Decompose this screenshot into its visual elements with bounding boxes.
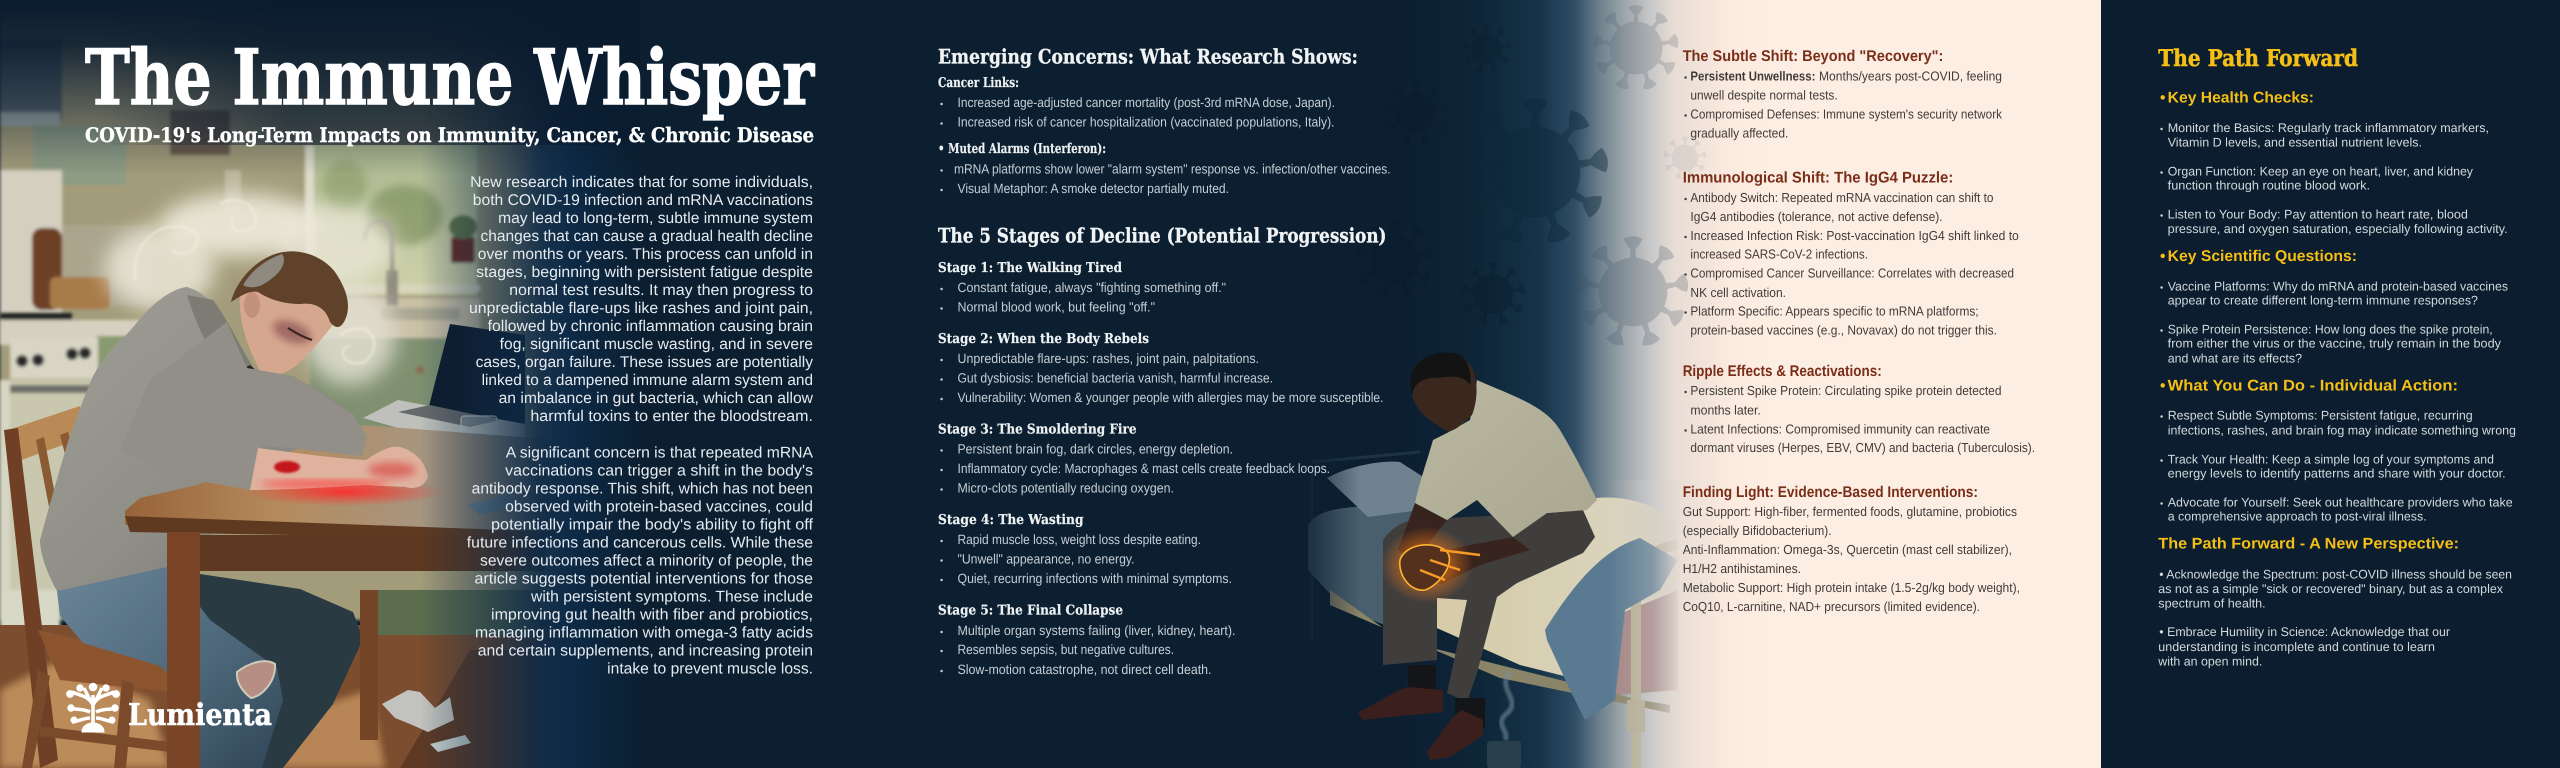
section: key health checks: • [2160, 124, 2163, 134]
logo wordmark: Lumienta [128, 698, 272, 733]
kitchen wall and cabinets [0, 23, 548, 622]
section: finding light: Metabolic Support: High protein intake (1.5-2g/kg body weight), [1683, 580, 2020, 595]
fade: kitchen into navy (top) [0, 0, 640, 175]
right dark panel [2101, 0, 2560, 768]
section: ripple effects: Latent Infections: Compromised immunity can reactivate [1690, 422, 1990, 436]
section: what you can do: • [2160, 455, 2163, 465]
stage 2: Gut dysbiosis: beneficial bacteria vanish, harmful increase. [958, 370, 1273, 386]
stage 3: Persistent brain fog, dark circles, energy depletion. [958, 442, 1233, 456]
stage 1: Normal blood work, but feeling "off." [958, 300, 1155, 314]
stage 3: Stage 3: The Smoldering Fire [938, 422, 1136, 438]
stage 2: Stage 2: When the Body Rebels [938, 331, 1149, 347]
stage 3 [938, 422, 1330, 496]
text block: intro paragraph: unpredictable flare-ups like rashes and joint pain, [469, 300, 813, 317]
text block: intro paragraph: an imbalance in gut bacteria, which can allow [499, 390, 814, 407]
logo icon [67, 683, 119, 732]
section: what you can do: What You Can Do - Individual Action: [2168, 377, 2458, 394]
section: immunological shift: IgG4 antibodies (tolerance, not active defense). [1690, 209, 1943, 224]
text block: intro paragraph: cases, organ failure. These issues are potentially [476, 354, 813, 371]
stage 3: • [940, 446, 943, 456]
logo: Lumienta [67, 683, 272, 733]
section: what you can do [2160, 377, 2516, 524]
stage 4: • [940, 536, 943, 546]
heading: five stages: The 5 Stages of Decline (Potential Progression) [938, 224, 1386, 248]
list: muted alarms: Visual Metaphor: A smoke detector partially muted. [958, 181, 1229, 196]
section: immunological shift: Increased Infection Risk: Post-vaccination IgG4 shift linked to [1690, 228, 2019, 243]
section: key health checks: Vitamin D levels, and essential nutrient levels. [2168, 135, 2422, 149]
stage 5: • [940, 627, 943, 637]
stage 3: • [940, 485, 943, 495]
stage 1 [938, 260, 1226, 314]
stage 1: Constant fatigue, always "fighting something off." [958, 280, 1226, 295]
text block: second paragraph: article suggests potential interventions for those [474, 571, 813, 588]
crumpled tissue and pill pack [382, 690, 471, 752]
section: finding light: CoQ10, L-carnitine, NAD+ precursors (limited evidence). [1683, 599, 1980, 614]
section: a new perspective: spectrum of health. [2158, 596, 2266, 610]
man: forearms [1398, 503, 1530, 585]
section: immunological shift: • [1684, 232, 1687, 242]
section: key scientific questions: • [2160, 326, 2163, 336]
smoke around head [105, 193, 396, 385]
section: key scientific questions: and what are its effects? [2168, 351, 2302, 365]
text block: second paragraph [467, 444, 814, 678]
virus dark 3 [1355, 221, 1435, 299]
glowing hands [1381, 527, 1480, 603]
list: muted alarms: • [940, 185, 943, 195]
stage 5 [938, 603, 1236, 677]
man: trousers [1383, 510, 1595, 702]
section: key scientific questions: Key Scientific Questions: [2168, 248, 2357, 265]
section: key health checks: • [2160, 89, 2165, 106]
fade: bed right into peach [1610, 480, 1680, 768]
laptop and water glass [363, 324, 525, 437]
fade: kitchen into navy (right) [420, 0, 640, 768]
stage 5: • [940, 646, 943, 656]
stage 5: Slow-motion catastrophe, not direct cell death. [958, 662, 1212, 677]
text block: second paragraph: managing inflammation with omega-3 fatty acids [475, 625, 813, 642]
section: the subtle shift: Persistent Unwellness: [1690, 68, 1815, 83]
section: the subtle shift [1683, 48, 2002, 141]
section: key health checks: Listen to Your Body: Pay attention to heart rate, blood [2168, 207, 2468, 221]
section: key health checks: Organ Function: Keep an eye on heart, liver, and kidney [2168, 164, 2474, 178]
list: cancer links: Cancer Links: [938, 75, 1019, 91]
section: ripple effects: dormant viruses (Herpes, EBV, CMV) and bacteria (Tuberculosis). [1690, 440, 2035, 455]
section: key health checks: pressure, and oxygen saturation, especially following activity. [2168, 222, 2508, 236]
section: what you can do: energy levels to identify patterns and share with your doctor. [2168, 466, 2506, 480]
section: immunological shift: Compromised Cancer Surveillance: Correlates with decreased [1690, 266, 2014, 281]
section: ripple effects: • [1684, 387, 1687, 397]
man: grey hoodie [40, 287, 367, 591]
text block: second paragraph: with persistent symptoms. These include [530, 589, 813, 606]
list: cancer links: Increased risk of cancer hospitalization (vaccinated populations, Italy). [958, 114, 1334, 129]
man: head [1412, 356, 1477, 431]
man: dark far leg [200, 574, 363, 768]
virus dark 2 [1383, 81, 1449, 145]
stage 4: "Unwell" appearance, no energy. [958, 552, 1134, 567]
stage 4: Stage 4: The Wasting [938, 512, 1084, 528]
section: the subtle shift: gradually affected. [1690, 126, 1788, 141]
section: the subtle shift: • [1684, 72, 1687, 82]
section: a new perspective: • Acknowledge the Spectrum: post-COVID illness should be seen [2159, 567, 2512, 581]
virus dark 1 [1462, 25, 1512, 73]
virus faint small [1663, 137, 1707, 179]
wooden chair [4, 406, 170, 768]
section: key health checks: Key Health Checks: [2168, 89, 2314, 106]
text block: intro paragraph: both COVID-19 infection and mRNA vaccinations [473, 192, 813, 209]
grey sleeve [204, 322, 367, 490]
section: key health checks [2160, 89, 2508, 236]
list: muted alarms [938, 141, 1391, 196]
stage 4 [938, 512, 1232, 586]
section: a new perspective: understanding is incomplete and continue to learn [2158, 640, 2435, 654]
text block: intro paragraph: may lead to long-term, subtle immune system [498, 210, 813, 227]
section: key scientific questions: from either the virus or the vaccine, truly remain in the body [2168, 337, 2502, 351]
section: key scientific questions [2160, 248, 2508, 365]
section: the subtle shift: The Subtle Shift: Beyond "Recovery": [1683, 48, 1943, 65]
list: muted alarms: mRNA platforms show lower "alarm system" response vs. infection/other vaccines. [954, 161, 1391, 176]
stage 4: • [940, 575, 943, 585]
section: the subtle shift: Months/years post-COVID, feeling [1819, 68, 2002, 83]
list: cancer links [938, 75, 1335, 129]
stage 3: • [940, 465, 943, 475]
section: what you can do: Advocate for Yourself: Seek out healthcare providers who take [2168, 496, 2513, 510]
list: muted alarms: • Muted Alarms (Interferon): [938, 141, 1106, 157]
section: immunological shift: Immunological Shift: The IgG4 Puzzle: [1683, 170, 1953, 187]
glowing forearm and hand with rash [250, 447, 428, 490]
section: immunological shift [1683, 170, 2019, 338]
text block: intro paragraph: New research indicates that for some individuals, [470, 174, 813, 191]
section: key health checks: function through routine blood work. [2168, 178, 2370, 192]
virus backdrop [1355, 5, 1707, 348]
man: dark socks and shoes [1358, 665, 1485, 760]
panel: kitchen illustration with man at table [0, 23, 548, 768]
section: key scientific questions: • [2160, 248, 2165, 265]
section: immunological shift: increased SARS-CoV-2 infections. [1690, 247, 1868, 262]
section: finding light: Finding Light: Evidence-Based Interventions: [1683, 484, 1978, 501]
section: a new perspective: with an open mind. [2157, 655, 2262, 669]
section: key scientific questions: appear to create different long-term immune responses? [2168, 294, 2478, 308]
section: ripple effects: • [1684, 426, 1687, 436]
text block: second paragraph: intake to prevent muscle loss. [607, 661, 813, 678]
text block: second paragraph: observed with protein-based vaccines, could [505, 499, 813, 516]
torn knee [237, 661, 275, 698]
text block: intro paragraph: normal test results. It may then progress to [509, 282, 813, 299]
stage 1: • [940, 284, 943, 294]
text block: intro paragraph: linked to a dampened immune alarm system and [482, 372, 813, 389]
pill pack on table [466, 494, 516, 515]
text block: second paragraph: vaccinations can trigger a shift in the body's [505, 462, 813, 480]
stage 4: • [940, 556, 943, 566]
stage 5: • [940, 666, 943, 676]
gradient band: navy to peach [1400, 0, 2101, 768]
stove [0, 313, 140, 650]
section: what you can do: Track Your Health: Keep a simple log of your symptoms and [2168, 452, 2494, 466]
section: immunological shift: protein-based vaccines (e.g., Novavax) do not trigger this. [1690, 322, 1997, 338]
list: cancer links: • [940, 118, 943, 128]
man: shirt [1415, 380, 1597, 537]
list: cancer links: • [940, 99, 943, 109]
section: immunological shift: Platform Specific: Appears specific to mRNA platforms; [1690, 303, 1979, 318]
stage 2: Unpredictable flare-ups: rashes, joint pain, palpitations. [958, 351, 1259, 366]
text block: intro paragraph: fog, significant muscle wasting, and in severe [500, 336, 813, 353]
section: immunological shift: • [1684, 307, 1687, 317]
stage 1: Stage 1: The Walking Tired [938, 260, 1122, 276]
man: light near leg jeans [57, 563, 283, 768]
section: key scientific questions: • [2160, 282, 2163, 292]
stage 2: Vulnerability: Women & younger people with allergies may be more susceptible. [958, 390, 1384, 405]
section: key health checks: • [2160, 167, 2163, 177]
man: neck and face [240, 292, 333, 374]
virus lower [1576, 236, 1690, 348]
section: finding light: H1/H2 antihistamines. [1683, 561, 1801, 576]
panel: man sitting on bed illustration [1308, 352, 1680, 768]
section: immunological shift: Antibody Switch: Repeated mRNA vaccination can shift to [1690, 190, 1994, 205]
section: finding light: Anti-Inflammation: Omega-3s, Quercetin (mast cell stabilizer), [1683, 542, 2012, 557]
text block: second paragraph: antibody response. This shift, which has not been [472, 480, 813, 498]
section: ripple effects: Ripple Effects & Reactivations: [1683, 363, 1882, 380]
section: key health checks: Monitor the Basics: Regularly track inflammatory markers, [2168, 121, 2489, 135]
steam and coffee mug [1487, 672, 1521, 768]
man: brown hair [231, 251, 348, 327]
section: a new perspective [2157, 536, 2512, 669]
stage 5: Stage 5: The Final Collapse [938, 603, 1123, 619]
section: key scientific questions: Spike Protein Persistence: How long does the spike protein, [2168, 322, 2493, 336]
text block: second paragraph: potentially impair the body's ability to fight off [491, 517, 814, 534]
title: The Immune Whisper [85, 33, 815, 122]
section: what you can do: • [2160, 377, 2165, 394]
stage 2: • [940, 394, 943, 404]
section: key health checks: • [2160, 210, 2163, 220]
blue cloth on bed [1545, 538, 1678, 720]
section: a new perspective: as not as a simple "sick or recovered" binary, but as a complex [2158, 582, 2504, 596]
virus top [1593, 5, 1679, 91]
stage 4: Rapid muscle loss, weight loss despite eating. [958, 532, 1201, 547]
stage 2: • [940, 374, 943, 384]
section: what you can do: • [2160, 498, 2163, 508]
bed frame and mattress [1308, 452, 1680, 768]
stage 2: • [940, 355, 943, 365]
wood floor [0, 590, 540, 768]
dining table [125, 425, 560, 768]
text block: second paragraph: future infections and cancerous cells. While these [467, 535, 813, 552]
section: the subtle shift: Compromised Defenses: Immune system's security network [1690, 106, 2002, 122]
fade: darker title backdrop [100, 0, 640, 145]
section: what you can do: infections, rashes, and brain fog may indicate something wrong [2168, 423, 2516, 437]
text block: intro paragraph: stages, beginning with persistent fatigue despite [476, 264, 813, 281]
heading: the path forward: The Path Forward [2158, 45, 2358, 72]
section: immunological shift: NK cell activation. [1690, 285, 1786, 300]
section: ripple effects: Persistent Spike Protein: Circulating spike protein detected [1690, 383, 2002, 398]
virus dark 4 [1460, 262, 1526, 326]
heading: emerging concerns: Emerging Concerns: What Research Shows: [938, 45, 1358, 69]
text block: second paragraph: severe outcomes affect a minority of people, the [480, 553, 813, 570]
section: finding light: Gut Support: High-fiber, fermented foods, glutamine, probiotics [1683, 504, 2017, 519]
section: a new perspective: The Path Forward - A New Perspective: [2158, 536, 2459, 553]
stage 2 [938, 331, 1384, 405]
text block: intro paragraph: followed by chronic inflammation causing brain [488, 318, 813, 335]
stage 5: Resembles sepsis, but negative cultures. [958, 642, 1174, 657]
text block: intro paragraph: harmful toxins to enter the bloodstream. [530, 408, 813, 425]
section: what you can do: Respect Subtle Symptoms: Persistent fatigue, recurring [2168, 409, 2473, 423]
text block: intro paragraph: over months or years. This process can unfold in [478, 246, 813, 263]
text block: second paragraph: and certain supplements, and increasing protein [478, 643, 813, 660]
section: finding light [1683, 484, 2020, 614]
list: cancer links: Increased age-adjusted cancer mortality (post-3rd mRNA dose, Japan). [958, 95, 1335, 110]
section: a new perspective: • Embrace Humility in Science: Acknowledge that our [2159, 625, 2450, 639]
hoodie: hood opening and drawstrings [187, 295, 255, 370]
section: finding light: (especially Bifidobacterium). [1683, 523, 1832, 538]
section: ripple effects [1683, 363, 2035, 455]
stage 3: Micro-clots potentially reducing oxygen. [958, 481, 1174, 496]
text block: intro paragraph: changes that can cause a gradual health decline [480, 228, 813, 245]
red glow under arm [255, 485, 436, 504]
text block: second paragraph: A significant concern is that repeated mRNA [506, 444, 814, 462]
stage 1: • [940, 304, 943, 314]
stage 5: Multiple organ systems failing (liver, kidney, heart). [958, 623, 1236, 638]
section: the subtle shift: • [1684, 110, 1687, 120]
section: the subtle shift: unwell despite normal tests. [1690, 87, 1838, 102]
list: muted alarms: • [940, 165, 943, 175]
subtitle: COVID-19's Long-Term Impacts on Immunity, Cancer, & Chronic Disease [85, 123, 814, 147]
section: immunological shift: • [1684, 270, 1687, 280]
section: what you can do: a comprehensive approach to post-viral illness. [2168, 510, 2427, 524]
text block: intro paragraph [469, 174, 814, 425]
section: key scientific questions: Vaccine Platforms: Why do mRNA and protein-based vaccines [2168, 279, 2508, 293]
section: immunological shift: • [1684, 194, 1687, 204]
text block: second paragraph: improving gut health with fiber and probiotics, [491, 607, 813, 624]
section: ripple effects: months later. [1690, 402, 1761, 417]
stage 4: Quiet, recurring infections with minimal symptoms. [958, 571, 1232, 586]
virus large left [1460, 98, 1610, 245]
section: what you can do: • [2160, 412, 2163, 422]
man: black hair [1410, 352, 1471, 395]
stage 3: Inflammatory cycle: Macrophages & mast cells create feedback loops. [958, 461, 1330, 476]
fade: bed left into dark [1290, 450, 1360, 680]
